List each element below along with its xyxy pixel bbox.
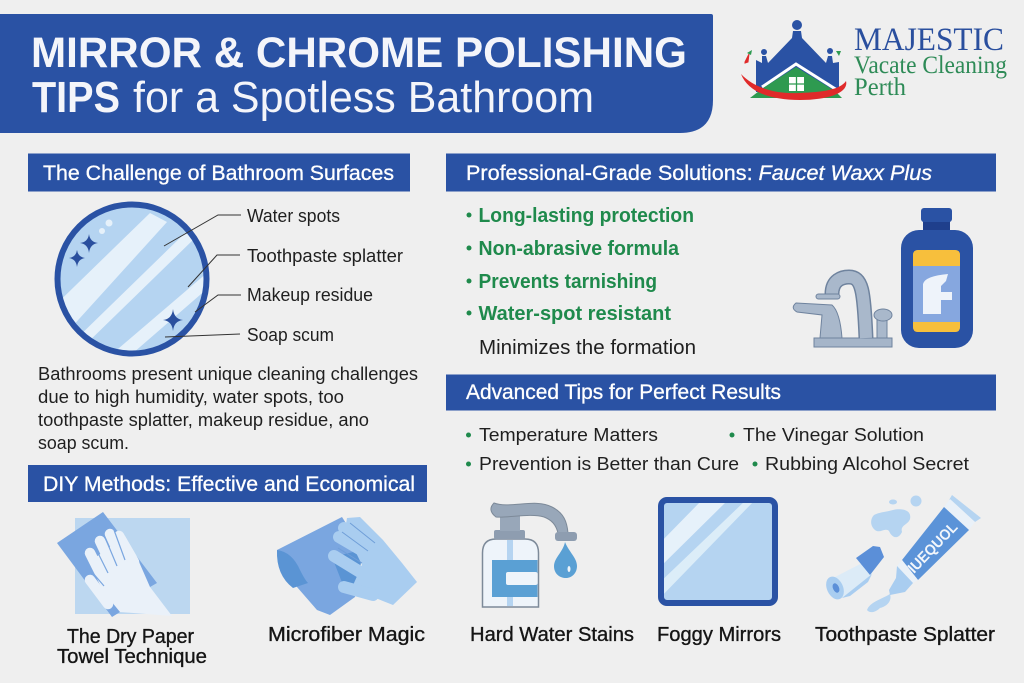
cap and roll: [823, 546, 884, 602]
label: toothpaste splatter: Toothpaste splatter: [247, 246, 403, 266]
label: water spots: Water spots: [247, 206, 340, 226]
tip: temperature matters: Temperature Matters: [479, 425, 658, 445]
splatter: [867, 496, 922, 612]
tip: rubbing alcohol: Rubbing Alcohol Secret: [765, 454, 969, 474]
label: Foggy Mirrors: Foggy Mirrors: [657, 624, 781, 646]
paragraph: bathroom challenges: Bathrooms present unique cleaning challenges: [38, 364, 418, 384]
paragraph: bathroom challenges: [38, 364, 418, 453]
icon: soap dispenser and tap: [482, 503, 577, 607]
icon: hand on paper towel: [57, 512, 190, 617]
title line 2: TIPS: [32, 73, 120, 122]
icon: hand on microfiber cloth: [277, 517, 417, 615]
icon: toothpaste tube: [823, 495, 981, 612]
tip: vinegar solution: The Vinegar Solution: [743, 425, 924, 445]
label: Toothpaste Splatter: Toothpaste Splatter: [815, 624, 995, 646]
icon: round mirror: [40, 204, 208, 360]
heading: DIY Methods: [28, 465, 427, 502]
title line 2: for a Spotless Bathroom: [133, 73, 594, 122]
bullet: long-lasting protection: Long-lasting protection: [478, 205, 694, 227]
label: makeup residue: Makeup residue: [247, 285, 373, 305]
heading: Advanced Tips: [446, 374, 996, 410]
heading: The Challenge of Bathroom Surfaces: [28, 154, 410, 192]
heading: Advanced Tips: Advanced Tips for Perfect Results: [466, 381, 781, 404]
tip: prevention: Prevention is Better than Cure: [479, 454, 739, 474]
logo wordmark: Vacate Cleaning: [854, 52, 1007, 79]
bullet: water-spot resistant: Water-spot resistant: [478, 303, 671, 325]
title line 1: MIRROR & CHROME POLISHING: [31, 29, 687, 77]
bullet: prevents tarnishing: Prevents tarnishing: [478, 271, 657, 293]
heading: Professional-Grade Solutions: [446, 154, 996, 192]
heading: DIY Methods: DIY Methods: Effective and Economical: [43, 473, 415, 496]
logo wordmark: [854, 22, 1007, 101]
note: minimizes the formation: Minimizes the formation: [479, 337, 696, 359]
icon: foggy mirror: [655, 500, 775, 603]
advanced tips list: [466, 425, 969, 474]
label: Microfiber Magic: Microfiber Magic: [268, 624, 425, 646]
label: soap scum: Soap scum: [247, 325, 334, 345]
benefits list: [466, 205, 696, 359]
logo: Majestic Vacate Cleaning Perth: [741, 20, 1007, 101]
label: The Dry Paper Towel Technique: The Dry Paper: [67, 626, 194, 648]
bottle logo letter: [923, 274, 952, 314]
paragraph: bathroom challenges: due to high humidity, water spots, too: [38, 387, 344, 407]
leader lines: [164, 215, 241, 337]
label: The Dry Paper Towel Technique: [57, 626, 207, 668]
bullet: non-abrasive formula: Non-abrasive formula: [478, 238, 680, 260]
icon: chrome faucet: [793, 277, 892, 347]
mirror diagram: [40, 204, 403, 360]
heading: The Challenge of Bathroom Surfaces: The Challenge of Bathroom Surfaces: [43, 162, 394, 185]
logo wordmark: Perth: [854, 74, 906, 101]
paragraph: bathroom challenges: toothpaste splatter, makeup residue, ano: [38, 410, 369, 430]
icon: house roof: [741, 20, 846, 100]
heading: Professional-Grade Solutions: Professional-Grade Solutions: Faucet Waxx Plus: [466, 162, 933, 185]
label: Hard Water Stains: Hard Water Stains: [470, 624, 634, 646]
label: The Dry Paper Towel Technique: Towel Technique: [57, 646, 207, 668]
paragraph: bathroom challenges: soap scum.: [38, 433, 129, 453]
tube brand text: IUEQUOL: [905, 519, 961, 577]
icon: Faucet Waxx bottle: [901, 208, 973, 348]
logo wordmark: MAJESTIC: [854, 22, 1004, 58]
title banner: [0, 14, 713, 133]
